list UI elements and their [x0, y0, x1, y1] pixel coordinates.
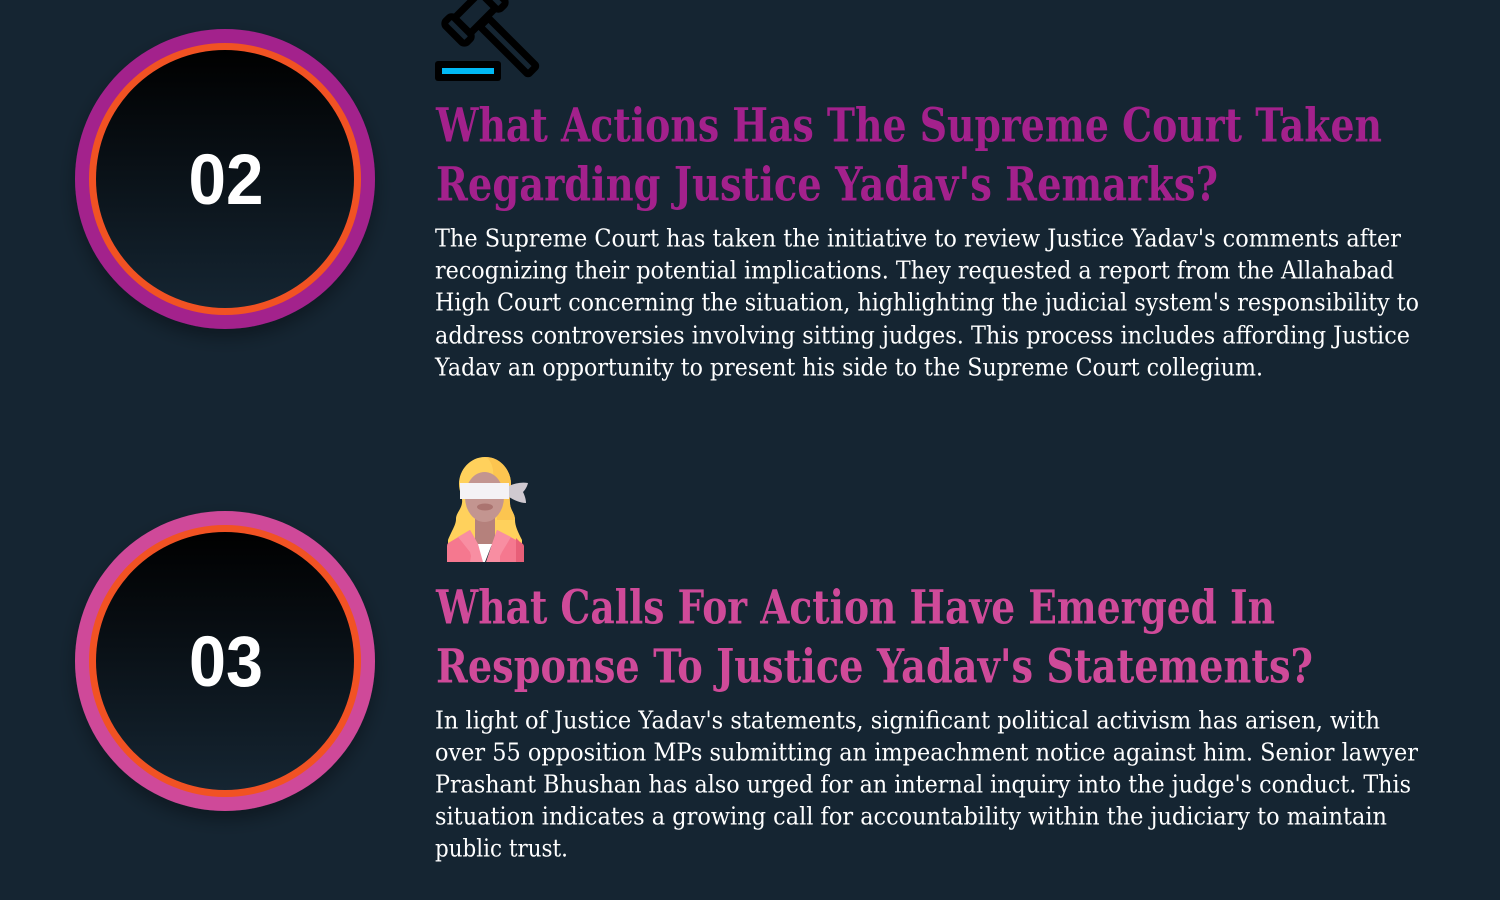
body text 03: over 55 opposition MPs submitting an impeachment notice against him. Senior lawyer [435, 738, 1418, 766]
body text 02: High Court concerning the situation, highlighting the judicial system's responsibility to [435, 288, 1419, 316]
body text 03: Prashant Bhushan has also urged for an internal inquiry into the judge's conduct. This [435, 770, 1411, 798]
icon: blindfolded justice woman [447, 457, 528, 562]
number badge 02: 02 [188, 141, 264, 220]
number badge 03: 03 [189, 623, 263, 702]
heading 03 [435, 580, 1313, 694]
body text 03: public trust. [435, 834, 568, 862]
body text 03: In light of Justice Yadav's statements, significant political activism has arisen, with [435, 706, 1380, 734]
panel: step 02 [75, 0, 1419, 381]
heading 03: What Calls For Action Have Emerged In [435, 580, 1275, 636]
icon: gavel [435, 0, 553, 91]
body text 03: situation indicates a growing call for accountability within the judiciary to maintain [435, 802, 1387, 830]
heading 02 [435, 98, 1382, 212]
body text 03 [435, 706, 1418, 862]
body text 02: recognizing their potential implications. They requested a report from the Allahabad [435, 256, 1394, 284]
body text 02: The Supreme Court has taken the initiative to review Justice Yadav's comments after [435, 224, 1401, 252]
panel: step 03 [75, 457, 1418, 862]
heading 03: Response To Justice Yadav's Statements? [436, 640, 1313, 694]
number badge 03 [75, 511, 375, 811]
number badge 02 [75, 29, 375, 329]
body text 02: Yadav an opportunity to present his side to the Supreme Court collegium. [434, 352, 1263, 382]
body text 02: address controversies involving sitting judges. This process includes affording Justice [435, 320, 1410, 350]
body text 02 [434, 224, 1419, 382]
heading 02: Regarding Justice Yadav's Remarks? [436, 158, 1218, 212]
